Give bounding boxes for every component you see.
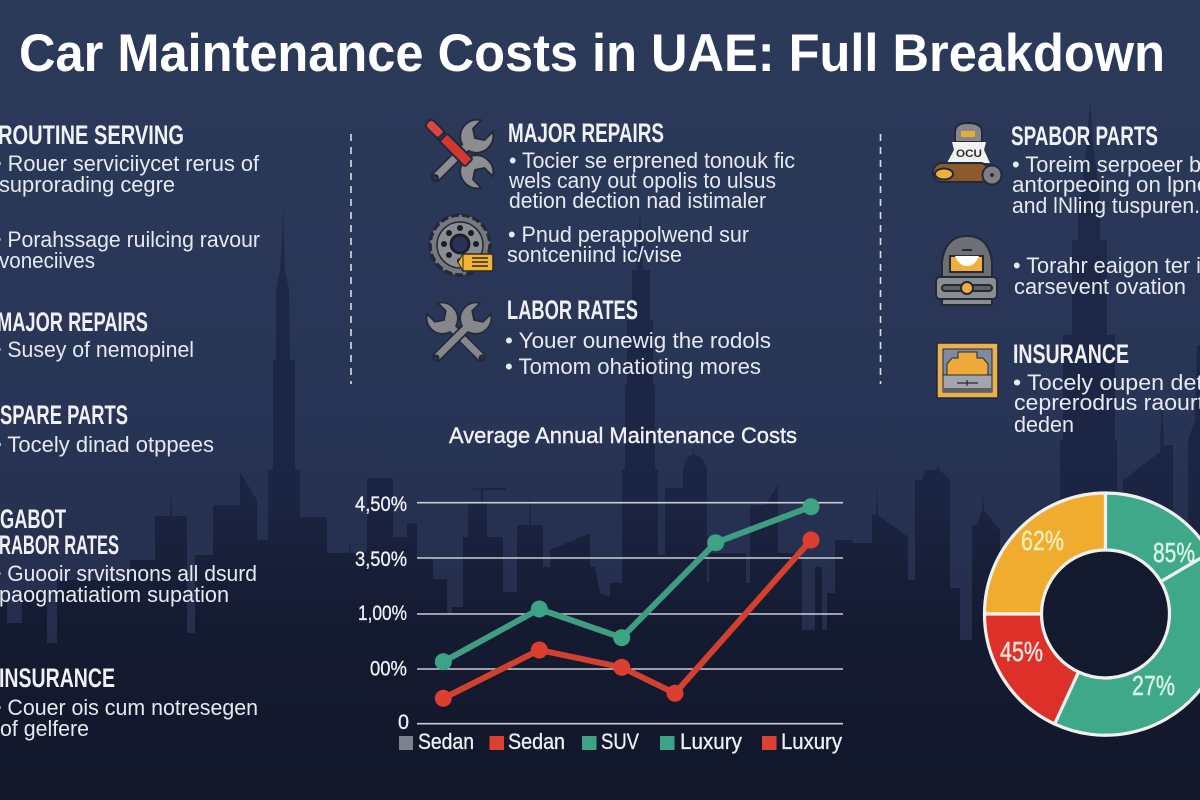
legend: Sedan	[508, 729, 565, 754]
text block: labor rates: GABOT	[0, 504, 66, 534]
segment: green 85%	[1106, 493, 1200, 582]
icon: service unit	[936, 236, 997, 305]
segment: amber 62%	[984, 493, 1106, 614]
donut labels: 45%	[1000, 636, 1043, 667]
text block: spare parts	[0, 400, 214, 457]
text block: insurance: deden	[1014, 412, 1074, 437]
divider right	[880, 134, 882, 384]
text block: routine serving: voneciives	[0, 248, 95, 273]
text block: labor rates: • Youer ounewig the rodols	[505, 328, 771, 353]
y axis labels: 3,50%	[355, 547, 407, 571]
legend: Luxury	[680, 729, 742, 754]
grid lines	[417, 503, 843, 724]
text block: major repairs: MAJOR REPAIRS	[508, 118, 664, 148]
icon: gear with chip	[430, 215, 493, 275]
text block: labor rates: • Guooir srvitsnons all dsurd	[0, 561, 257, 586]
text block: major repairs: detion dection nad istimaler	[509, 188, 766, 213]
donut chart	[984, 493, 1200, 735]
text block: routine serving	[0, 120, 260, 273]
text block: major repairs: • Tocier se erprened tonouk fic	[509, 148, 795, 173]
text block: insurance	[1013, 339, 1200, 437]
legend: Luxury	[781, 729, 842, 754]
icon: crossed wrenches	[422, 298, 496, 370]
donut labels	[1000, 525, 1195, 701]
icon: wrench and red screwdriver	[422, 114, 499, 194]
legend	[399, 729, 842, 754]
text block: insurance: • Couer ois cum notresegen	[0, 695, 258, 720]
title: Car Maintenance Costs in UAE: Full Breakdown	[19, 24, 1165, 83]
y axis labels: 0	[398, 710, 409, 734]
y axis labels	[355, 492, 409, 734]
text block: insurance: • Tocely oupen deti	[1013, 370, 1200, 395]
series: red line	[435, 532, 820, 707]
icon: spare parts	[933, 123, 1002, 184]
y axis labels: 00%	[370, 656, 407, 680]
text block: labor rates	[0, 504, 257, 607]
panel: center column	[422, 114, 795, 379]
text block: spare parts: • Tocely dinad otppees	[0, 432, 214, 457]
text block: insurance	[0, 663, 258, 741]
text block: parts note	[507, 222, 749, 267]
text block: parts note: • Pnud perappolwend sur	[508, 222, 749, 247]
text block: parts note: sontceniind ic/vise	[507, 242, 682, 267]
construction crane	[473, 488, 506, 505]
y axis labels: 1,00%	[358, 601, 407, 625]
text block: routine serving: • Porahssage ruilcing ravour	[0, 227, 260, 252]
text block: labor rates	[505, 295, 771, 379]
text block: insurance: of gelfere	[0, 716, 89, 741]
text block: major repairs	[508, 118, 795, 213]
text block: labor rates: paogmatiatiom supation	[0, 582, 229, 607]
divider left	[350, 134, 352, 384]
text block: major repairs: MAJOR REPAIRS	[0, 307, 148, 337]
chart title: Average Annual Maintenance Costs	[449, 423, 797, 448]
legend: Sedan	[418, 729, 474, 754]
donut labels: 27%	[1132, 670, 1175, 701]
text block: insurance: INSURANCE	[1013, 339, 1129, 369]
text block: spare parts: SPARE PARTS	[0, 400, 128, 430]
text block: service note: carsevent ovation	[1014, 274, 1186, 299]
donut hole	[1042, 550, 1170, 678]
text block: routine serving: suprorading cegre	[0, 172, 175, 197]
text block: routine serving: ROUTINE SERVING	[0, 120, 184, 150]
text block: major repairs: wels cany out opolis to ulsus	[508, 168, 776, 193]
panel: left column	[0, 120, 260, 741]
donut labels: 62%	[1021, 525, 1064, 556]
text block: insurance: ceprerodrus raourt	[1014, 390, 1200, 415]
y axis labels: 4,50%	[355, 492, 407, 516]
text block: labor rates: LABOR RATES	[507, 295, 638, 325]
icon: spare parts: OCU	[956, 148, 982, 160]
legend: SUV	[601, 729, 639, 754]
text block: insurance: INSURANCE	[0, 663, 115, 693]
text block: labor rates: • Tomom ohatioting mores	[505, 354, 761, 379]
text block: major repairs	[0, 307, 194, 362]
panel: right column	[933, 121, 1200, 437]
text block: spare parts	[1011, 121, 1200, 218]
line chart: average annual maintenance costs	[355, 423, 843, 754]
text block: major repairs: • Susey of nemopinel	[0, 337, 194, 362]
text block: service note	[1013, 253, 1200, 299]
text block: labor rates: RABOR RATES	[0, 530, 119, 560]
segment: green 27%	[1055, 553, 1200, 735]
text block: routine serving: • Rouer serviciiycet rerus of	[0, 151, 260, 176]
segment: red 45%	[984, 614, 1079, 724]
series: green line	[435, 498, 820, 670]
icon: insurance panel	[937, 343, 998, 398]
